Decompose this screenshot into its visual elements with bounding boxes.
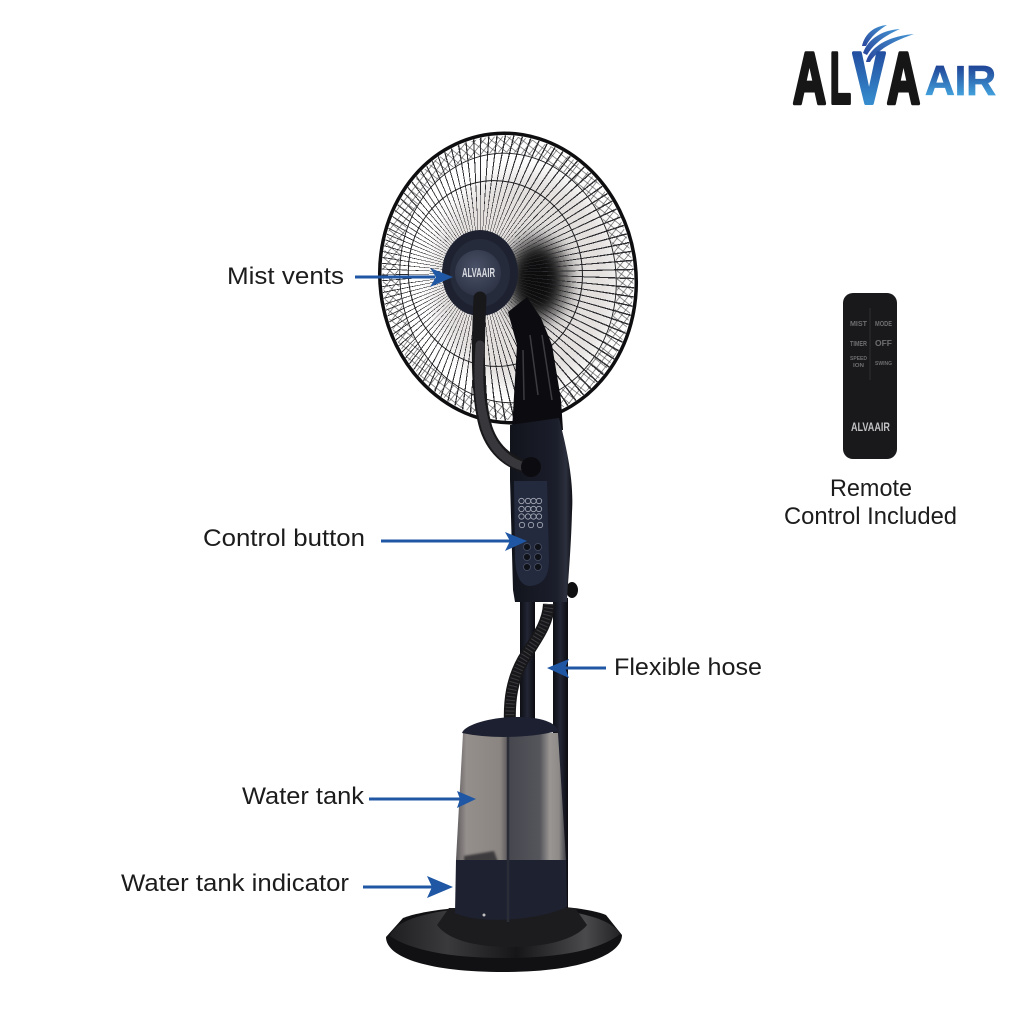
label: Flexible hose: Flexible hose bbox=[614, 654, 762, 681]
label: Flexible hose bbox=[547, 654, 762, 681]
label: Water tank bbox=[242, 783, 476, 810]
remote button labels: ION bbox=[853, 363, 864, 369]
fan neck bbox=[508, 297, 563, 430]
remote caption: Remote bbox=[830, 475, 912, 502]
logo wordmark ALVA: A bbox=[793, 39, 826, 119]
label: Control button bbox=[203, 525, 527, 552]
logo wordmark ALVA: L bbox=[830, 39, 851, 119]
base inner collar bbox=[437, 908, 587, 947]
remote caption: Control Included bbox=[784, 503, 957, 530]
base bbox=[386, 905, 622, 972]
remote button labels: MODE bbox=[875, 321, 892, 328]
logo wing icon bbox=[862, 25, 914, 62]
fan blades bbox=[433, 172, 617, 388]
arrow: flexible hose bbox=[547, 659, 606, 678]
arrow: water tank indicator bbox=[363, 876, 453, 898]
logo wordmark ALVA: V bbox=[853, 39, 885, 119]
label: Water tank indicator: Water tank indicator bbox=[121, 870, 349, 897]
inner water floater bbox=[464, 851, 498, 862]
label: Mist vents bbox=[227, 263, 453, 290]
arrow: water tank bbox=[369, 791, 476, 808]
fan product illustration bbox=[378, 132, 638, 972]
remote button labels: SWING bbox=[875, 361, 892, 367]
hose knob bbox=[521, 457, 541, 477]
remote button labels: TIMER bbox=[850, 341, 867, 348]
label: Control button: Control button bbox=[203, 525, 365, 552]
hub logo: ALVAAIR bbox=[462, 266, 495, 280]
control body bbox=[510, 418, 572, 602]
fan grille bbox=[382, 135, 634, 421]
remote divider bbox=[869, 308, 871, 380]
tank seam bbox=[507, 733, 509, 922]
upper hose bbox=[478, 298, 532, 468]
panel buttons lower bbox=[524, 544, 542, 570]
motor shadow bbox=[507, 240, 567, 320]
label: Water tank indicator bbox=[121, 870, 453, 898]
label: Water tank: Water tank bbox=[242, 783, 365, 810]
logo wordmark ALVA bbox=[793, 39, 920, 119]
logo wordmark AIR: AIR bbox=[925, 57, 996, 104]
crosshatch outer wires bbox=[376, 131, 640, 425]
side knob bbox=[566, 582, 578, 598]
logo: Alva Air bbox=[793, 25, 996, 119]
logo wordmark ALVA: A bbox=[887, 39, 920, 119]
remote button labels: OFF bbox=[875, 339, 892, 348]
radial spokes bbox=[382, 135, 634, 421]
poles bbox=[520, 598, 568, 910]
water tank bbox=[455, 717, 567, 922]
remote caption bbox=[784, 475, 957, 530]
arrow: mist vents bbox=[355, 268, 453, 287]
tank cap bbox=[462, 717, 558, 737]
control panel bbox=[514, 481, 549, 586]
tank indicator dot bbox=[482, 914, 486, 916]
remote logo: ALVAAIR bbox=[851, 420, 890, 434]
tank lower dark section bbox=[455, 860, 567, 920]
remote button labels: MIST bbox=[850, 321, 868, 328]
lower hose bbox=[510, 604, 549, 724]
remote button labels: SPEED bbox=[850, 356, 867, 362]
label: Mist vents: Mist vents bbox=[227, 263, 344, 290]
tank left panel bbox=[456, 733, 508, 860]
remote button labels bbox=[850, 321, 892, 369]
panel buttons upper bbox=[519, 498, 543, 528]
hub bbox=[442, 230, 518, 316]
neck highlights bbox=[523, 335, 552, 400]
remote control bbox=[843, 293, 897, 459]
arrow: control button bbox=[381, 532, 527, 551]
tank right panel bbox=[508, 733, 566, 860]
grille rings bbox=[363, 118, 653, 438]
